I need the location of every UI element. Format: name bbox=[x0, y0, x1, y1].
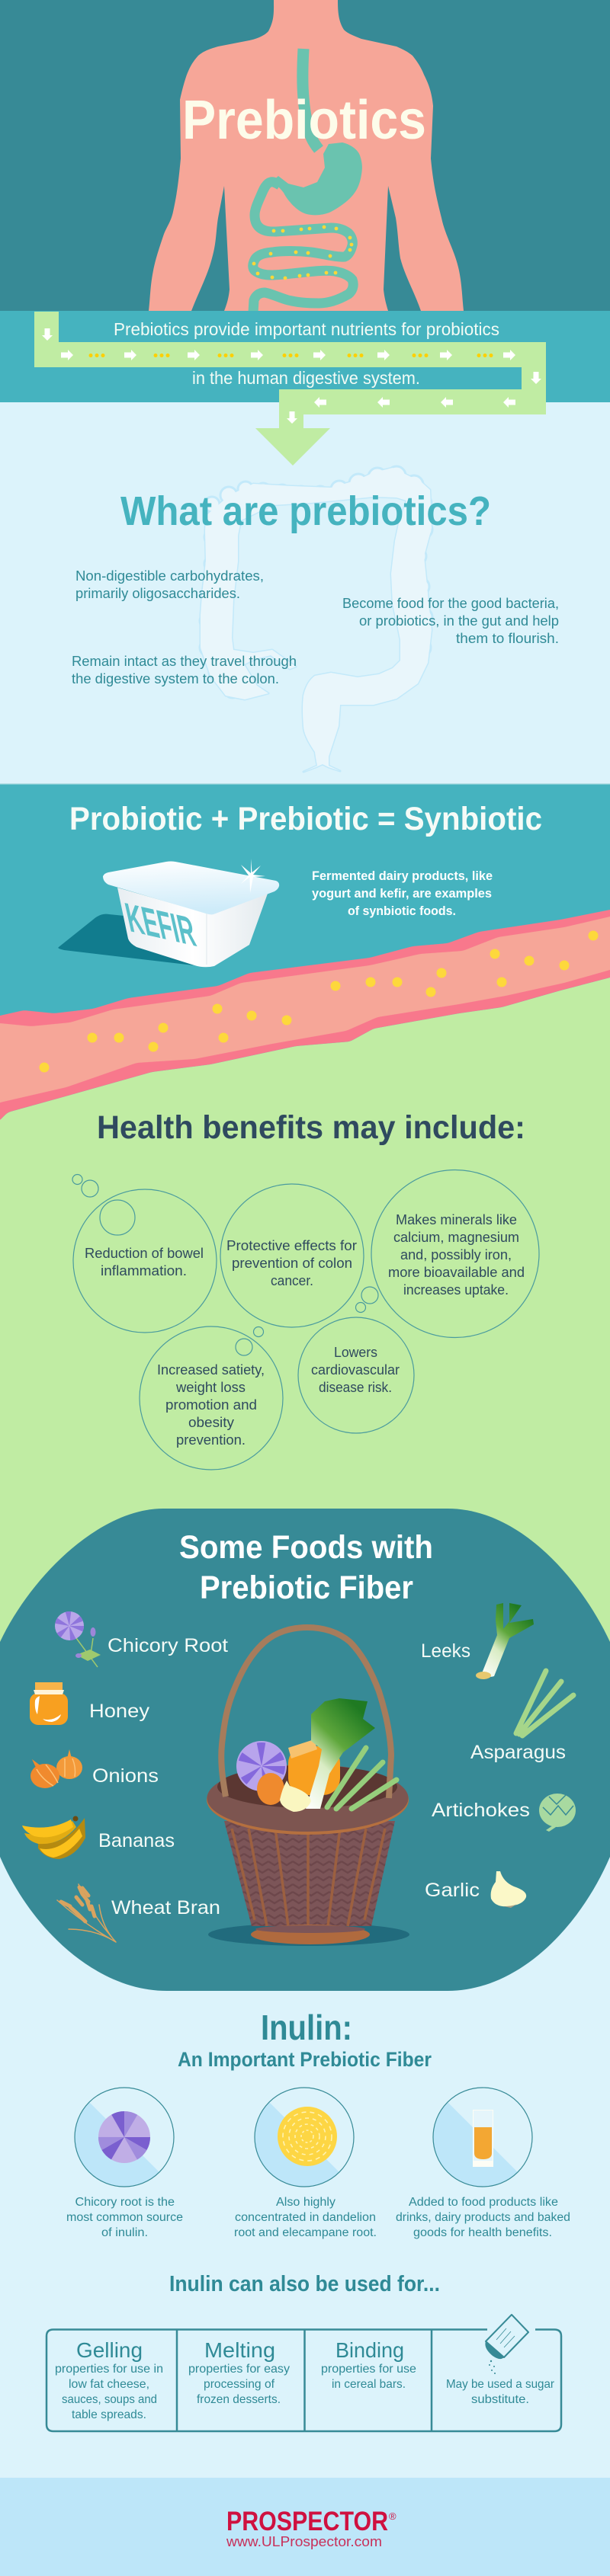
basket rim bbox=[207, 1765, 409, 1835]
inulin source: dandelion bbox=[234, 2088, 377, 2239]
panel heading: Prebiotic Fiber bbox=[200, 1570, 413, 1606]
body silhouette bbox=[149, 0, 464, 311]
kefir text: yogurt and kefir, are examples bbox=[312, 886, 492, 901]
basket body bbox=[224, 1821, 395, 1926]
column: sugar substitute bbox=[446, 2378, 555, 2406]
panel: foods with prebiotic fiber bbox=[0, 1509, 610, 1991]
bubble: colon cancer: Protective effects for bbox=[226, 1238, 357, 1253]
basket ribs bbox=[232, 1829, 385, 1926]
bubble: satiety: Increased satiety, bbox=[157, 1362, 265, 1378]
benefit bubbles bbox=[72, 1170, 539, 1470]
logo: PROSPECTOR bbox=[226, 2507, 388, 2536]
bubble: cardiovascular: Lowers bbox=[334, 1345, 377, 1360]
caption: Also highly bbox=[276, 2196, 336, 2209]
text: become food: them to flourish. bbox=[456, 631, 559, 646]
column: gelling bbox=[55, 2338, 163, 2421]
icon: glass of juice bbox=[473, 2110, 493, 2167]
bubble: satiety: weight loss bbox=[175, 1380, 246, 1395]
text: become food: or probiotics, in the gut and help bbox=[359, 613, 559, 629]
bubble: colon cancer: cancer. bbox=[271, 1273, 313, 1288]
inulin source: food products bbox=[396, 2088, 570, 2239]
intro band: in the human digestive system. bbox=[192, 368, 420, 388]
bubble: minerals bbox=[388, 1212, 525, 1298]
caption bbox=[234, 2196, 377, 2239]
basket foot bbox=[251, 1925, 370, 1944]
bubble: minerals: more bioavailable and bbox=[388, 1265, 525, 1280]
bubble: satiety bbox=[157, 1362, 265, 1448]
text: become food bbox=[342, 596, 559, 646]
column: gelling: sauces, soups and bbox=[62, 2393, 157, 2406]
column: binding: Binding bbox=[336, 2338, 404, 2362]
column: melting: properties for easy bbox=[188, 2363, 290, 2376]
kefir label: KEFIR bbox=[121, 894, 200, 955]
bubble outlines bbox=[72, 1170, 539, 1470]
icon: onions bbox=[30, 1749, 82, 1788]
food labels: Bananas bbox=[98, 1830, 175, 1851]
blood vessel illustration bbox=[0, 907, 610, 1135]
text: remain intact: Remain intact as they travel through bbox=[72, 654, 297, 669]
basket interior bbox=[217, 1765, 397, 1808]
basket contents bbox=[236, 1698, 396, 1812]
caption: root and elecampane root. bbox=[234, 2226, 377, 2239]
food labels: Garlic bbox=[425, 1880, 480, 1901]
food labels: Onions bbox=[92, 1765, 159, 1787]
bubble: reduction of inflammation: Reduction of bowel bbox=[85, 1246, 204, 1261]
colon illustration bbox=[200, 466, 432, 772]
food labels: Honey bbox=[89, 1701, 150, 1722]
text: become food: Become food for the good bacteria, bbox=[342, 596, 559, 611]
yellow dots in gut bbox=[252, 226, 353, 280]
column: binding: in cereal bars. bbox=[332, 2378, 406, 2391]
icon: chicory bbox=[55, 1611, 101, 1667]
column: gelling: Gelling bbox=[76, 2338, 143, 2362]
kefir tub illustration bbox=[58, 859, 279, 967]
column: melting: frozen desserts. bbox=[197, 2393, 281, 2406]
column: sugar substitute: May be used a sugar bbox=[446, 2378, 555, 2391]
bubble: minerals: increases uptake. bbox=[403, 1282, 509, 1298]
icon: honey jar bbox=[30, 1682, 68, 1725]
text: non-digestible carbohydrates: Non-digestible carbohydrates, bbox=[75, 568, 264, 584]
bubble: colon cancer: prevention of colon bbox=[232, 1256, 352, 1271]
green area under vessel bbox=[0, 972, 610, 1158]
icon: sugar shaker bbox=[485, 2315, 528, 2374]
panel: synbiotic bbox=[0, 783, 610, 1119]
uses table bbox=[47, 2315, 561, 2431]
bubble: reduction of inflammation: inflammation. bbox=[101, 1263, 187, 1278]
text: non-digestible carbohydrates: primarily oligosaccharides. bbox=[75, 586, 240, 601]
digestive tract bbox=[252, 49, 362, 312]
inulin heading bbox=[178, 2008, 432, 2071]
yellow nutrient dots bbox=[40, 931, 598, 1073]
caption bbox=[396, 2196, 570, 2239]
bubble: minerals: and, possibly iron, bbox=[400, 1247, 512, 1262]
bubble: minerals: Makes minerals like bbox=[396, 1212, 517, 1227]
basket illustration bbox=[207, 1627, 409, 1946]
panel heading: Some Foods with bbox=[179, 1529, 433, 1566]
background: green lower section bbox=[0, 1128, 610, 1752]
kefir text: of synbiotic foods. bbox=[348, 904, 456, 918]
bubble: minerals: calcium, magnesium bbox=[393, 1230, 519, 1245]
inulin heading: An Important Prebiotic Fiber bbox=[178, 2048, 432, 2071]
column: melting: processing of bbox=[204, 2378, 275, 2391]
bubble: cardiovascular: disease risk. bbox=[319, 1380, 392, 1395]
heading: inulin uses: Inulin can also be used for... bbox=[169, 2272, 440, 2296]
background: light blue inulin section bbox=[0, 1752, 610, 2484]
heading: health benefits: Health benefits may include: bbox=[97, 1109, 525, 1146]
kefir text bbox=[312, 869, 493, 918]
icon: yellow flower bbox=[278, 2107, 337, 2166]
footer: ® bbox=[389, 2510, 396, 2522]
column: gelling: properties for use in bbox=[55, 2363, 163, 2376]
caption: Added to food products like bbox=[409, 2196, 558, 2209]
inulin source: chicory bbox=[66, 2088, 183, 2239]
sparkle bbox=[241, 859, 265, 893]
caption: concentrated in dandelion bbox=[235, 2211, 376, 2224]
green flow arrow bbox=[34, 312, 546, 466]
column: binding: properties for use bbox=[321, 2363, 416, 2376]
footer bbox=[0, 2478, 610, 2576]
food labels: Artichokes bbox=[432, 1800, 530, 1821]
bubble: reduction of inflammation bbox=[85, 1246, 204, 1278]
bubble: satiety: obesity bbox=[188, 1415, 234, 1430]
text: remain intact bbox=[72, 654, 297, 686]
column: sugar substitute: substitute. bbox=[471, 2393, 529, 2406]
caption bbox=[66, 2196, 183, 2239]
food labels: Wheat Bran bbox=[111, 1897, 220, 1918]
title: Prebiotics bbox=[182, 90, 426, 151]
website: www.ULProspector.com bbox=[226, 2534, 382, 2549]
bubble: satiety: promotion and bbox=[165, 1397, 257, 1413]
heading: what are prebiotics: What are prebiotics? bbox=[120, 488, 491, 534]
caption: most common source bbox=[66, 2211, 183, 2224]
icon: asparagus bbox=[516, 1671, 573, 1736]
food labels bbox=[89, 1635, 566, 1918]
light blue section background bbox=[0, 402, 610, 785]
bubble: satiety: prevention. bbox=[176, 1432, 246, 1448]
panel heading bbox=[179, 1529, 433, 1606]
heading: synbiotic: Probiotic + Prebiotic = Synbiotic bbox=[69, 801, 542, 837]
food labels: Chicory Root bbox=[108, 1635, 228, 1656]
header panel bbox=[0, 0, 610, 312]
small white arrows bbox=[42, 328, 541, 424]
caption: drinks, dairy products and baked bbox=[396, 2211, 570, 2224]
food labels: Leeks bbox=[421, 1640, 470, 1662]
caption: goods for health benefits. bbox=[413, 2226, 552, 2239]
column: gelling: low fat cheese, bbox=[69, 2378, 149, 2391]
column: binding bbox=[321, 2338, 416, 2391]
caption: Chicory root is the bbox=[75, 2196, 175, 2209]
column: melting: Melting bbox=[204, 2338, 275, 2362]
food labels: Asparagus bbox=[470, 1742, 566, 1763]
icon: wheat bbox=[57, 1884, 116, 1942]
kefir text: Fermented dairy products, like bbox=[312, 869, 493, 883]
column: melting bbox=[188, 2338, 290, 2406]
icon: bananas bbox=[22, 1816, 85, 1859]
column: gelling: table spreads. bbox=[72, 2408, 146, 2421]
icon: artichoke bbox=[539, 1794, 576, 1832]
intro text: Prebiotics provide important nutrients for probiotics bbox=[114, 319, 499, 339]
intro band bbox=[0, 311, 610, 466]
caption: of inulin. bbox=[101, 2226, 148, 2239]
icon: garlic bbox=[491, 1871, 526, 1908]
icon: leek bbox=[476, 1603, 534, 1679]
bubble: colon cancer bbox=[226, 1238, 357, 1288]
basket shadow bbox=[208, 1923, 409, 1946]
yellow dots on arrow bbox=[88, 354, 493, 357]
text: non-digestible carbohydrates bbox=[75, 568, 264, 601]
text: remain intact: the digestive system to the colon. bbox=[72, 671, 279, 686]
icon: purple flower bbox=[98, 2111, 150, 2163]
bubble: cardiovascular: cardiovascular bbox=[311, 1362, 400, 1378]
bubble: cardiovascular bbox=[311, 1345, 400, 1395]
basket handle bbox=[221, 1627, 391, 1798]
inulin heading: Inulin: bbox=[261, 2008, 352, 2047]
